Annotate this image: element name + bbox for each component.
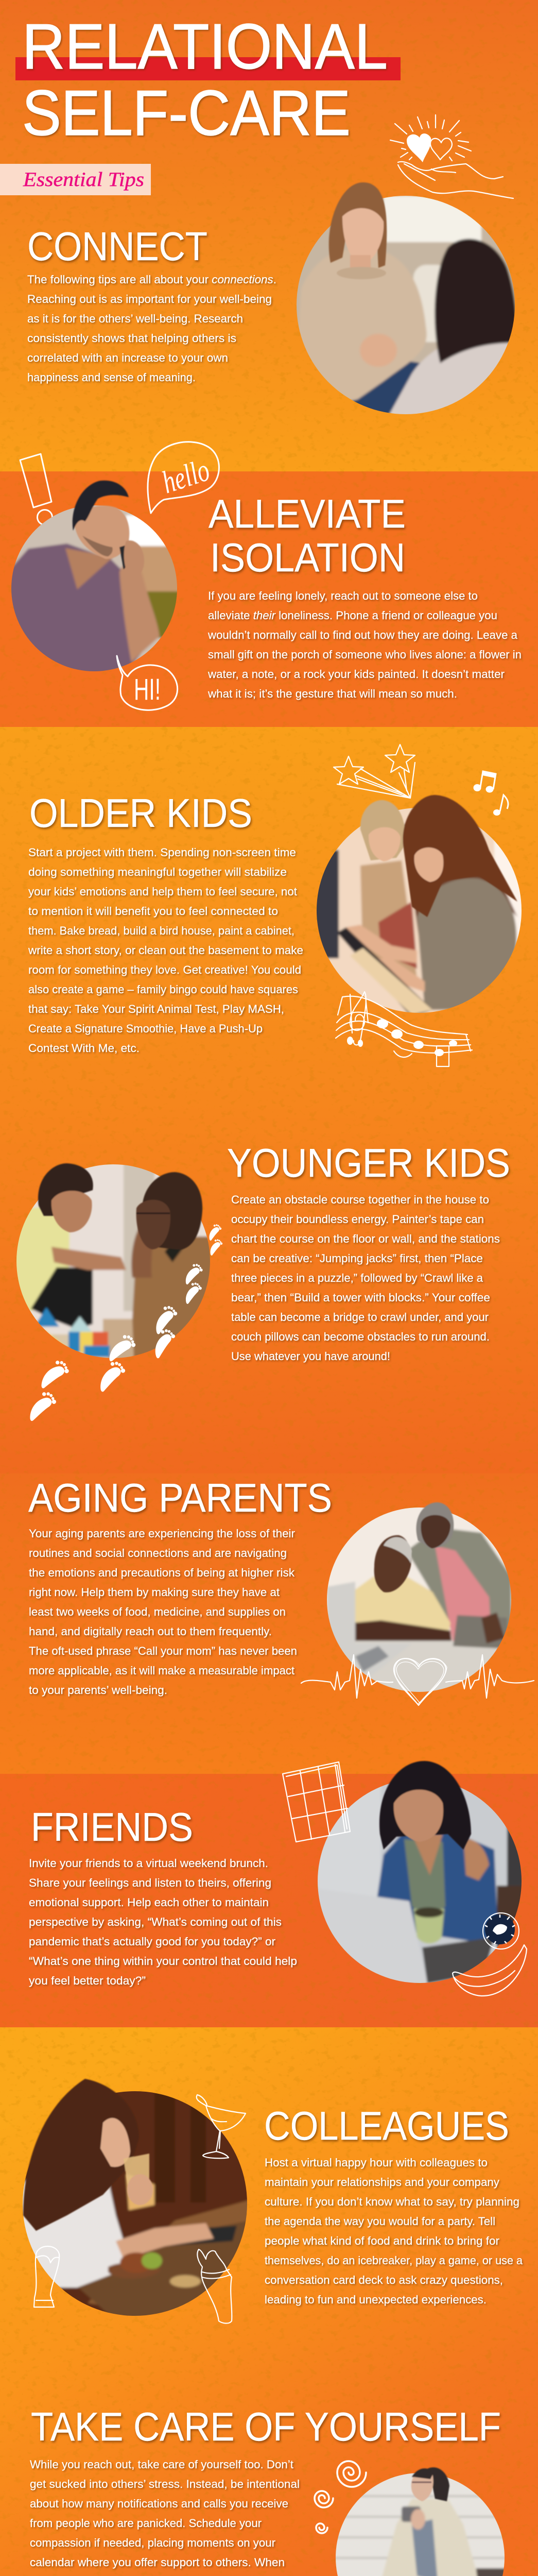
title line: self-care: SELF-CARE [22, 78, 351, 149]
icon: chocolate bar [283, 1762, 350, 1842]
text block: take care of yourself: from people who are panicked. Schedule your [30, 2517, 262, 2530]
section: connect [27, 224, 276, 384]
text block: older kids: room for something they love. Get creative! You could [28, 963, 301, 976]
title banner [15, 11, 401, 149]
text block: colleagues: people what kind of food and drink to bring for [265, 2234, 499, 2247]
text block: colleagues: leading to fun and unexpected experiences. [265, 2293, 487, 2306]
text block: colleagues: the agenda the way you would for a party. Tell [265, 2215, 495, 2228]
text block: colleagues: maintain your relationships and your company [265, 2176, 499, 2189]
text block: alleviate isolation: what it is; it’s the gesture that will mean so much. [207, 687, 457, 700]
text block: younger kids: couch pillows can become obstacles to run around. [231, 1330, 490, 1343]
text block: alleviate isolation: water, a note, or a rock your kids painted. It doesn’t matter [207, 668, 505, 681]
text block: older kids: them. Bake bread, build a bird house, paint a cabinet, [28, 924, 294, 937]
text block: aging parents: Your aging parents are experiencing the loss of their [29, 1527, 295, 1540]
photo: mother and daughter at piano [314, 795, 525, 1018]
text block: take care of yourself [30, 2458, 300, 2576]
text block: younger kids: chart the course on the floor or wall, and the stations [231, 1232, 500, 1245]
text block: aging parents: right now. Help them by making sure they have at [29, 1586, 280, 1599]
title line: relational: RELATIONAL [22, 11, 388, 82]
photo: two people talking [297, 181, 515, 414]
section: younger kids [227, 1140, 510, 1363]
text block: friends: emotional support. Help each other to maintain [29, 1896, 269, 1909]
heading: connect: CONNECT [27, 224, 207, 269]
text block: older kids: also create a game – family bingo could have squares [28, 983, 298, 996]
text block: younger kids: three pieces in a puzzle,” followed by “Crawl like a [231, 1272, 483, 1284]
heading: aging parents: AGING PARENTS [28, 1475, 332, 1520]
essential tips tag [0, 164, 151, 195]
text block: alleviate isolation [207, 589, 522, 700]
text block: connect: The following tips are all about your connections. [27, 273, 276, 286]
text block: younger kids: occupy their boundless energy. Painter’s tape can [231, 1213, 484, 1226]
text block: connect: as it is for the others’ well-being. Research [27, 312, 243, 325]
text block: aging parents: to your parents’ well-being. [29, 1684, 167, 1697]
text block: alleviate isolation: alleviate their loneliness. Phone a friend or colleague you [208, 609, 497, 622]
icon: music notes [474, 771, 508, 816]
text block: aging parents: the emotions and precautions of being at higher risk [29, 1566, 295, 1579]
text block: older kids: Create a Signature Smoothie, Have a Push-Up [28, 1022, 263, 1035]
icon: hello speech bubble [148, 442, 219, 513]
text block: younger kids: Create an obstacle course together in the house to [231, 1193, 489, 1206]
icon: footprints trail [28, 1224, 223, 1427]
text block: connect: Reaching out is as important for your well-being [27, 293, 272, 306]
text block: aging parents: least two weeks of food, medicine, and supplies on [29, 1605, 286, 1618]
icon: hello speech bubble: hello [158, 452, 214, 500]
text block: alleviate isolation: If you are feeling lonely, reach out to someone else to [208, 589, 478, 602]
icon: hearts in a hand [390, 115, 513, 198]
photo: woman with mug in blanket [334, 2467, 510, 2576]
photo: father and toddler high five [13, 1162, 214, 1363]
text block: younger kids [231, 1193, 500, 1363]
text block: aging parents [29, 1527, 297, 1697]
text block: alleviate isolation: small gift on the porch of someone who lives alone: a flower in [208, 648, 522, 661]
text block: friends: “What’s one thing within your control that could help [29, 1955, 297, 1968]
icon: music staff [336, 992, 472, 1066]
essential tips tag: Essential Tips [23, 168, 144, 191]
text block: colleagues: Host a virtual happy hour with colleagues to [265, 2156, 488, 2169]
photo: woman eating at laptop [314, 1761, 525, 1986]
text block: younger kids: table can become a bridge to crawl under, and your [231, 1311, 489, 1324]
icon: exclamation mark [20, 454, 53, 524]
text block: friends: Share your feelings and listen to theirs, offering [29, 1876, 271, 1889]
photo: man on the phone [8, 481, 183, 675]
photo: woman with drink and food [21, 2079, 250, 2318]
text block: younger kids: bear,” then “Build a tower with blocks.” Your coffee [231, 1291, 490, 1304]
text block: alleviate isolation: wouldn’t normally call to find out how they are doing. Leave a [207, 629, 518, 641]
text block: colleagues [265, 2156, 523, 2306]
text block: younger kids: can be creative: “Jumping jacks” first, then “Place [231, 1252, 483, 1265]
text block: older kids [28, 846, 303, 1055]
text block: connect: happiness and sense of meaning. [27, 371, 196, 384]
text block: friends: you feel better today?” [29, 1974, 146, 1987]
section: friends [29, 1804, 297, 1987]
icon: beer glasses [34, 2246, 232, 2324]
icon: kiwi and banana [453, 1913, 527, 1996]
text block: colleagues: conversation card deck to ask crazy questions, [265, 2274, 503, 2286]
icon: heartbeat line with heart [301, 1655, 534, 1705]
text block: aging parents: routines and social connections and are navigating [29, 1547, 287, 1560]
icon: martini glass [197, 2095, 246, 2158]
text block: aging parents: hand, and digitally reach out to them frequently. [29, 1625, 272, 1638]
text block: friends: perspective by asking, “What’s coming out of this [29, 1916, 282, 1928]
icon: hi speech bubble [117, 656, 178, 710]
icon: hi speech bubble: HI! [134, 673, 161, 706]
section: older kids [28, 790, 303, 1055]
icon: shooting stars [334, 744, 415, 798]
text block: older kids: that say: Take Your Spirit Animal Test, Play MASH, [28, 1003, 284, 1015]
text block: older kids: to mention it will benefit you to feel connected to [28, 905, 278, 918]
text block: connect [27, 273, 276, 384]
text block: take care of yourself: compassion if needed, placing moments on your [30, 2536, 275, 2549]
text block: take care of yourself: While you reach out, take care of yourself too. Don’t [30, 2458, 293, 2471]
heading: younger kids: YOUNGER KIDS [227, 1140, 510, 1185]
section: colleagues [264, 2103, 523, 2306]
text block: colleagues: culture. If you don’t know what to say, try planning [265, 2195, 519, 2208]
heading: older kids: OLDER KIDS [29, 790, 252, 836]
text block: aging parents: more applicable, as it will make a measurable impact [29, 1664, 294, 1677]
text block: connect: correlated with an increase to your own [27, 351, 228, 364]
text block: take care of yourself: get sucked into others’ stress. Instead, be intentional [30, 2478, 300, 2490]
section: take care of yourself [30, 2404, 501, 2576]
text block: take care of yourself: about how many notifications and calls you receive [30, 2497, 288, 2510]
section: aging parents [28, 1475, 332, 1697]
heading: alleviate isolation: ISOLATION [210, 535, 405, 580]
photo: older couple at a laptop [324, 1502, 515, 1698]
text block: older kids: your kids’ emotions and help them to feel secure, not [28, 885, 297, 898]
text block: aging parents: The oft-used phrase “Call your mom” has never been [29, 1645, 297, 1657]
section: alleviate isolation [207, 491, 522, 700]
icon: spirals [315, 2461, 366, 2533]
heading: friends: FRIENDS [31, 1804, 193, 1850]
text block: older kids: doing something meaningful together will stabilize [28, 866, 287, 878]
text block: friends: Invite your friends to a virtual weekend brunch. [29, 1857, 268, 1870]
text block: connect: consistently shows that helping others is [27, 332, 236, 345]
heading: take care of yourself: TAKE CARE OF YOURSELF [31, 2404, 501, 2449]
text block: older kids: Contest With Me, etc. [28, 1042, 140, 1055]
text block: friends [29, 1857, 297, 1987]
heading: alleviate isolation: ALLEVIATE [209, 491, 406, 536]
text block: older kids: write a short story, or clean out the basement to make [28, 944, 303, 957]
text block: friends: pandemic that’s actually good for you today?” or [29, 1935, 275, 1948]
heading: alleviate isolation [209, 491, 406, 580]
text block: younger kids: Use whatever you have around! [231, 1350, 390, 1363]
heading: colleagues: COLLEAGUES [264, 2103, 509, 2148]
text block: colleagues: themselves, do an icebreaker, play a game, or use a [265, 2254, 523, 2267]
text block: older kids: Start a project with them. Spending non-screen time [28, 846, 296, 859]
text block: take care of yourself: calendar where you offer support to others. When [30, 2556, 285, 2569]
